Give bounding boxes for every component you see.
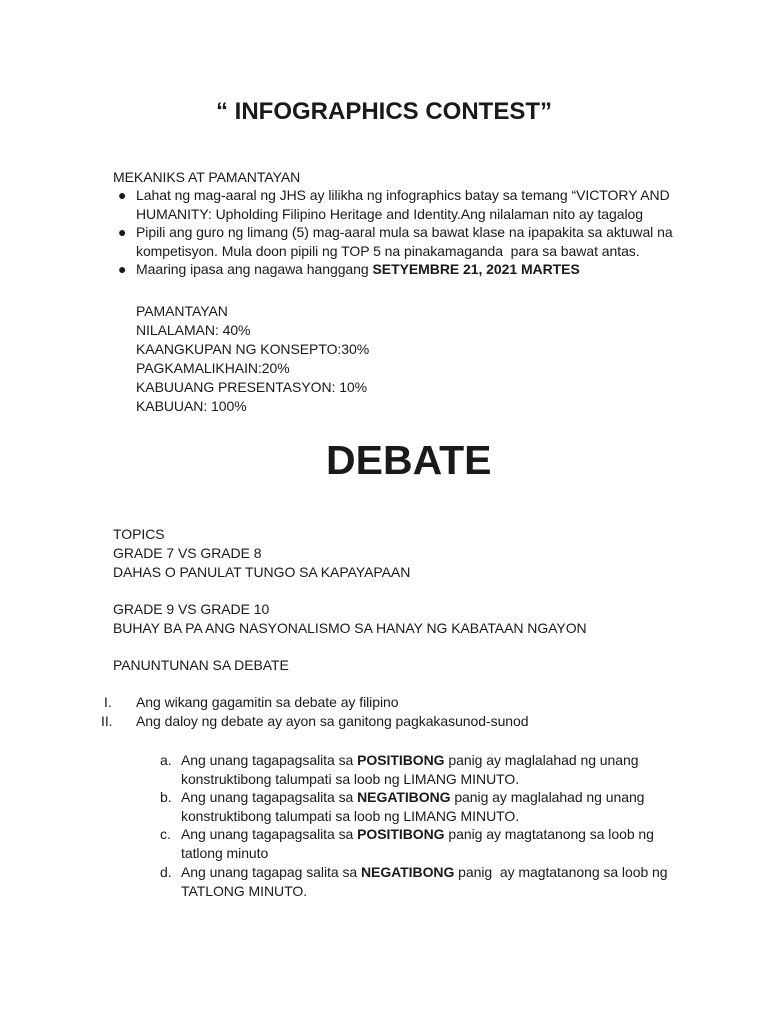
- section: rules: a.: [160, 752, 172, 768]
- section: topics: BUHAY BA PA ANG NASYONALISMO SA HANAY NG KABATAAN NGAYON: [113, 620, 587, 636]
- section: rules: [101, 694, 668, 899]
- section: topics: PANUNTUNAN SA DEBATE: [113, 657, 289, 673]
- section: rules: II.: [101, 713, 113, 729]
- section: rules: Ang unang tagapagsalita sa POSITIBONG panig ay magtatanong sa loob ng: [181, 826, 654, 842]
- section: rules: c.: [160, 826, 171, 842]
- section: mekaniks: ●: [118, 187, 126, 203]
- section: topics: TOPICS: [113, 526, 165, 542]
- section: pamantayan: PAMANTAYAN: [136, 303, 228, 319]
- section: mekaniks: [113, 169, 673, 277]
- section: rules: konstruktibong talumpati sa loob ng LIMANG MINUTO.: [181, 771, 519, 787]
- section: mekaniks: ●: [118, 261, 126, 277]
- section: topics: [113, 526, 587, 673]
- section: topics: GRADE 9 VS GRADE 10: [113, 601, 269, 617]
- section: pamantayan: NILALAMAN: 40%: [136, 322, 250, 338]
- section: pamantayan: KABUUAN: 100%: [136, 398, 247, 414]
- section: mekaniks: Lahat ng mag-aaral ng JHS ay lilikha ng infographics batay sa temang “VICTORY AND: [136, 187, 670, 203]
- section: rules: I.: [104, 694, 112, 710]
- title: “ INFOGRAPHICS CONTEST”: [216, 98, 552, 125]
- section: rules: tatlong minuto: [181, 845, 268, 861]
- section: rules: d.: [160, 864, 172, 880]
- section: topics: DAHAS O PANULAT TUNGO SA KAPAYAPAAN: [113, 564, 410, 580]
- section: rules: Ang unang tagapagsalita sa POSITIBONG panig ay maglalahad ng unang: [181, 752, 638, 768]
- section: rules: Ang unang tagapag salita sa NEGATIBONG panig ay magtatanong sa loob ng: [181, 864, 668, 880]
- heading: debate: DEBATE: [326, 437, 492, 483]
- section: topics: GRADE 7 VS GRADE 8: [113, 545, 261, 561]
- section: mekaniks: kompetisyon. Mula doon pipili ng TOP 5 na pinakamaganda para sa bawat antas.: [136, 243, 640, 259]
- section: pamantayan: [136, 303, 369, 414]
- section: mekaniks: ●: [118, 224, 126, 240]
- section: mekaniks: HUMANITY: Upholding Filipino Heritage and Identity.Ang nilalaman nito ay tagalog: [136, 206, 643, 222]
- section: rules: konstruktibong talumpati sa loob ng LIMANG MINUTO.: [181, 808, 519, 824]
- section: mekaniks: MEKANIKS AT PAMANTAYAN: [113, 169, 300, 185]
- section: rules: Ang daloy ng debate ay ayon sa ganitong pagkakasunod-sunod: [136, 713, 529, 729]
- section: rules: Ang wikang gagamitin sa debate ay filipino: [136, 694, 399, 710]
- section: pamantayan: PAGKAMALIKHAIN:20%: [136, 360, 290, 376]
- section: pamantayan: KAANGKUPAN NG KONSEPTO:30%: [136, 341, 369, 357]
- section: rules: Ang unang tagapagsalita sa NEGATIBONG panig ay maglalahad ng unang: [181, 789, 644, 805]
- section: rules: TATLONG MINUTO.: [181, 883, 307, 899]
- section: pamantayan: KABUUANG PRESENTASYON: 10%: [136, 379, 367, 395]
- section: mekaniks: Maaring ipasa ang nagawa hanggang SETYEMBRE 21, 2021 MARTES: [136, 261, 580, 277]
- section: mekaniks: Pipili ang guro ng limang (5) mag-aaral mula sa bawat klase na ipapakita sa aktuwal na: [136, 224, 673, 240]
- section: rules: b.: [160, 789, 172, 805]
